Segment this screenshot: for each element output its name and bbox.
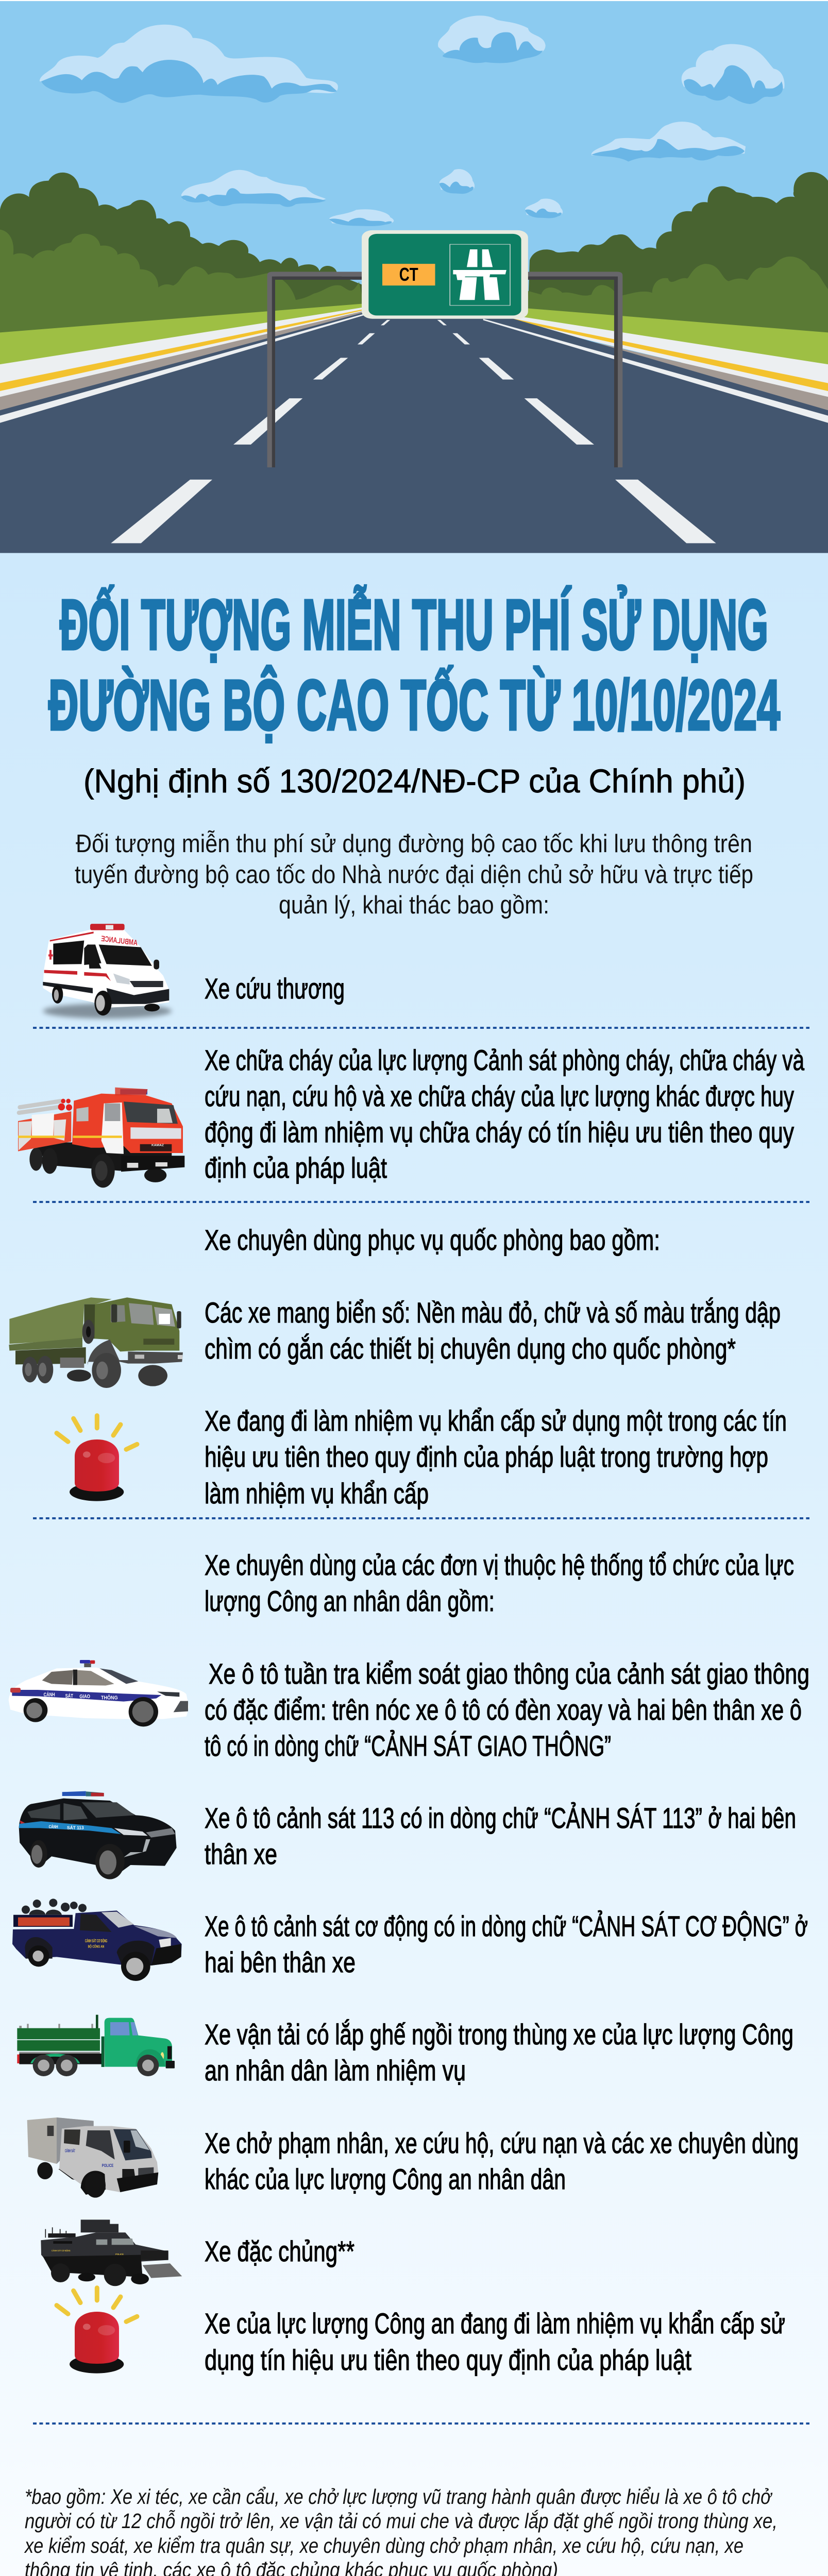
icon: prisoner van: CẢNH SÁT [65,2148,75,2153]
intro paragraph: Đối tượng miễn thu phí sử dụng đường bộ cao tốc khi lưu thông trên [76,830,752,858]
sky [0,1,828,363]
text: mobile police pickup: hai bên thân xe [205,1946,356,1978]
text: police heading: lượng Công an nhân dân gồm: [205,1585,495,1617]
trees left [0,173,364,334]
icon: mobile police pickup [12,1899,182,1981]
text: defence heading: Xe chuyên dùng phục vụ quốc phòng bao gồm: [205,1224,660,1256]
clouds [40,15,785,226]
icon: armored vehicle [41,2219,182,2286]
header illustration: highway [0,1,828,553]
text: emergency vehicles [205,1404,787,1510]
divider [33,2422,809,2425]
gantry frame [267,272,622,467]
icon: prisoner van [27,2117,158,2198]
text: emergency vehicles: làm nhiệm vụ khẩn cấp [205,1477,429,1510]
icon: traffic police car: SÁT [65,1692,73,1699]
text: transport truck: an nhân dân làm nhiệm vụ [205,2054,466,2087]
road verges [0,303,828,411]
icon: fire truck: KAMAZ [151,1144,164,1147]
text: transport truck [205,2018,793,2087]
title [48,585,780,745]
text: prisoner van [205,2127,799,2195]
footnote: defence vehicles [24,2485,778,2576]
text: prisoner van: khác của lực lượng Công an nhân dân [205,2163,566,2195]
text: fire truck: định của pháp luật [205,1151,387,1184]
text: police emergency [205,2307,785,2376]
divider [33,1027,809,1029]
icon: traffic police car: CẢNH [44,1691,55,1698]
divider [33,1201,809,1203]
icon: warning light [57,1416,137,1501]
trees right [528,172,828,334]
icon: ambulance [43,924,172,1019]
text: 113 police suv [205,1802,796,1870]
text: armored vehicle: Xe đặc chủng** [205,2235,354,2267]
highway sign [362,230,528,319]
icon: fire truck [18,1088,184,1188]
text: mobile police pickup [205,1910,808,1978]
highway sign: CT [399,264,418,285]
road edge lines [0,314,828,423]
icon: ambulance: AMBULANCE [101,934,138,947]
text: fire truck [205,1044,805,1184]
icon: armored vehicle: CẢNH SÁT CƠ ĐỘNG [52,2249,71,2252]
icon: traffic police car: GIAO [79,1694,90,1700]
icon: armored vehicle: POLICE [115,2253,124,2256]
text: traffic police car: tô có in dòng chữ “CẢNH SÁT GIAO THÔNG” [205,1730,611,1762]
icon: mobile police pickup: BỘ CÔNG AN [88,1944,104,1949]
icon: traffic police car: THÔNG [101,1694,118,1701]
icon: traffic police car [9,1660,189,1726]
text: traffic police car [205,1657,809,1762]
divider [33,1517,809,1519]
icon: 113 police suv: CẢNH [49,1823,58,1829]
text: defence plates [205,1296,781,1365]
intro paragraph [75,830,753,919]
icon: 113 police suv: SÁT 113 [67,1825,84,1831]
icon: mobile police pickup: CẢNH SÁT CƠ ĐỘNG [85,1938,107,1943]
text: ambulance: Xe cứu thương [205,972,345,1005]
road surface [0,312,828,553]
icon: army truck [9,1297,183,1388]
lane markings [111,320,716,543]
text: 113 police suv: thân xe [205,1838,277,1870]
intro paragraph: quản lý, khai thác bao gồm: [279,891,549,919]
text: police heading [205,1549,794,1617]
icon: warning light 2 [57,2288,137,2374]
icon: green transport truck [17,2015,175,2076]
icon: prisoner van: POLICE [102,2163,114,2168]
icon: 113 police suv [19,1791,177,1879]
text: police emergency: dụng tín hiệu ưu tiên theo quy định của pháp luật [205,2344,691,2376]
page background [0,553,828,2576]
subtitle: (Nghị định số 130/2024/NĐ-CP của Chính phủ) [83,762,746,800]
